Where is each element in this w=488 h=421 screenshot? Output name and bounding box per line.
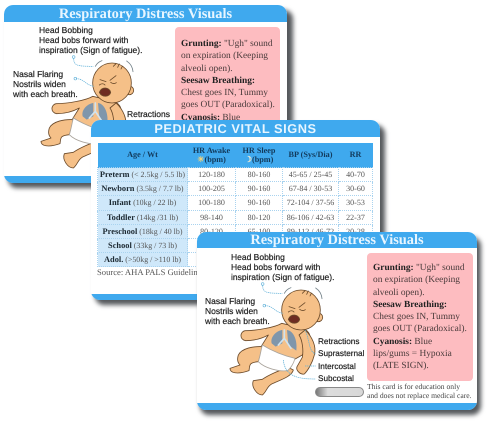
table: vital signs by age: 45-65 / 25-45 — [289, 170, 332, 179]
heading: vital signs title: PEDIATRIC VITAL SIGNS — [154, 121, 317, 136]
text: nasal flaring — [12, 69, 78, 99]
panel: clinical signs — [175, 27, 280, 177]
table: vital signs by age: 120-180 — [198, 170, 225, 179]
panel: clinical signs: on expiration (Keeping — [181, 51, 268, 61]
table: vital signs by age: 65-100 — [248, 227, 270, 236]
icon: badge slot — [315, 387, 364, 397]
panel: clinical signs: Grunting: "Ugh" sound — [181, 39, 273, 49]
table: vital signs by age: 40-70 — [346, 170, 365, 179]
panel: clinical signs: Seesaw Breathing: — [181, 76, 255, 86]
panel: clinical signs: Chest goes IN, Tummy — [181, 88, 268, 98]
text: source line: Source: AHA PALS Guidelines — [97, 267, 205, 277]
panel: clinical signs: (LATE SIGN). — [373, 361, 429, 371]
table: vital signs by age: 100-205 — [198, 184, 225, 193]
panel: clinical signs: Cyanosis: Blue — [373, 336, 432, 346]
text: nasal flaring: Nostrils widen — [13, 79, 66, 89]
table: vital signs by age: 30-60 — [346, 184, 365, 193]
text: head bobbing: Head Bobbing — [231, 252, 285, 262]
table: vital signs by age: 80-120 — [248, 213, 270, 222]
table: vital signs by age: 20-28 — [346, 227, 365, 236]
heading: front card title: Respiratory Distress Visuals — [250, 232, 424, 248]
table: vital signs by age: ☽(bpm) — [245, 155, 273, 164]
text: nasal flaring: with each breath. — [205, 316, 270, 326]
panel: clinical signs: goes OUT (Paradoxical). — [181, 100, 275, 110]
text: head bobbing: inspiration (Sign of fatigue). — [39, 45, 142, 55]
table: vital signs by age: 67-84 / 30-53 — [289, 184, 332, 193]
table: vital signs by age: Age / Wt — [127, 150, 158, 159]
text: head bobbing: inspiration (Sign of fatigue). — [231, 272, 334, 282]
text: nasal flaring: Nasal Flaring — [205, 296, 255, 306]
table: vital signs by age: Preterm (< 2.5kg / 5.5 lb) — [100, 170, 185, 179]
table: vital signs by age: BP (Sys/Dia) — [289, 150, 332, 159]
text: head bobbing: Head bobs forward with — [231, 262, 320, 272]
text: head bobbing: Head Bobbing — [39, 25, 93, 35]
table: vital signs by age: RR — [350, 150, 361, 159]
illustration: baby with retraction leaders — [230, 282, 324, 396]
text: retraction types: Intercostal — [318, 362, 356, 371]
table: vital signs by age: 22-37 — [346, 213, 365, 222]
heading: front card title — [197, 232, 477, 248]
panel: clinical signs — [367, 253, 473, 381]
text: retraction types — [318, 337, 364, 383]
panel: clinical signs: Chest goes IN, Tummy — [373, 312, 460, 322]
text: nasal flaring: with each breath. — [13, 89, 78, 99]
table: vital signs by age: 90-160 — [248, 184, 270, 193]
panel: clinical signs: alveoli open). — [373, 288, 425, 298]
text: disclaimer: This card is for education only — [367, 382, 460, 391]
text: head bobbing — [39, 25, 142, 55]
text: nasal flaring — [204, 296, 270, 326]
table: vital signs by age: 90-160 — [248, 198, 270, 207]
text: head bobbing: Head bobs forward with — [39, 35, 128, 45]
panel: clinical signs: Grunting: "Ugh" sound — [373, 263, 465, 273]
illustration: baby in respiratory distress — [40, 55, 134, 168]
text: retraction types: Retractions — [318, 337, 359, 346]
table: vital signs by age — [97, 143, 373, 267]
table: vital signs by age: 98-140 — [200, 213, 223, 222]
table: vital signs by age: Adol. (>50kg / >110 lb) — [104, 255, 181, 264]
panel: clinical signs: goes OUT (Paradoxical). — [373, 324, 467, 334]
text: nasal flaring: Nostrils widen — [205, 306, 258, 316]
table: vital signs by age: HR Sleep — [242, 146, 275, 154]
text: nasal flaring: Nasal Flaring — [13, 69, 63, 79]
table: vital signs by age: Toddler (14kg /31 lb) — [107, 213, 178, 222]
table: vital signs by age: School (33kg / 73 lb) — [108, 241, 177, 250]
table: vital signs by age: Preschool (18kg / 40 lb) — [103, 227, 182, 236]
table: vital signs by age: Infant (10kg / 22 lb) — [109, 198, 176, 207]
table: vital signs by age: 72-104 / 37-56 — [287, 198, 334, 207]
panel: clinical signs: Cyanosis: Blue — [181, 112, 240, 122]
table: vital signs by age: 80-160 — [248, 170, 270, 179]
table: vital signs by age: ☀(bpm) — [197, 155, 226, 164]
table: vital signs by age: HR Awake — [193, 146, 230, 154]
heading: back card title: Respiratory Distress Visuals — [59, 6, 232, 22]
heading: vital signs title — [91, 120, 380, 137]
text: retractions: Retractions — [127, 109, 170, 119]
text: disclaimer: and does not replace medical care. — [367, 391, 472, 400]
table: vital signs by age: 30-53 — [346, 198, 365, 207]
text: retraction types: Suprasternal — [318, 349, 364, 358]
text: disclaimer — [367, 382, 472, 400]
panel: clinical signs: Seesaw Breathing: — [373, 300, 447, 310]
panel: clinical signs: on expiration (Keeping — [373, 275, 460, 285]
panel: clinical signs: lips/gums = Hypoxia — [373, 349, 452, 359]
panel: clinical signs: alveoli open). — [181, 64, 233, 74]
table: vital signs by age: 100-180 — [198, 198, 225, 207]
table: vital signs by age: 80-120 — [200, 227, 223, 236]
heading: back card title — [4, 5, 287, 22]
text: retraction types: Subcostal — [318, 374, 354, 383]
text: head bobbing — [231, 252, 334, 282]
table: vital signs by age: Newborn (3.5kg / 7.7 lb) — [101, 184, 184, 193]
table: vital signs by age: 89-112 / 46-72 — [287, 227, 334, 236]
table: vital signs by age: 86-106 / 42-63 — [287, 213, 334, 222]
